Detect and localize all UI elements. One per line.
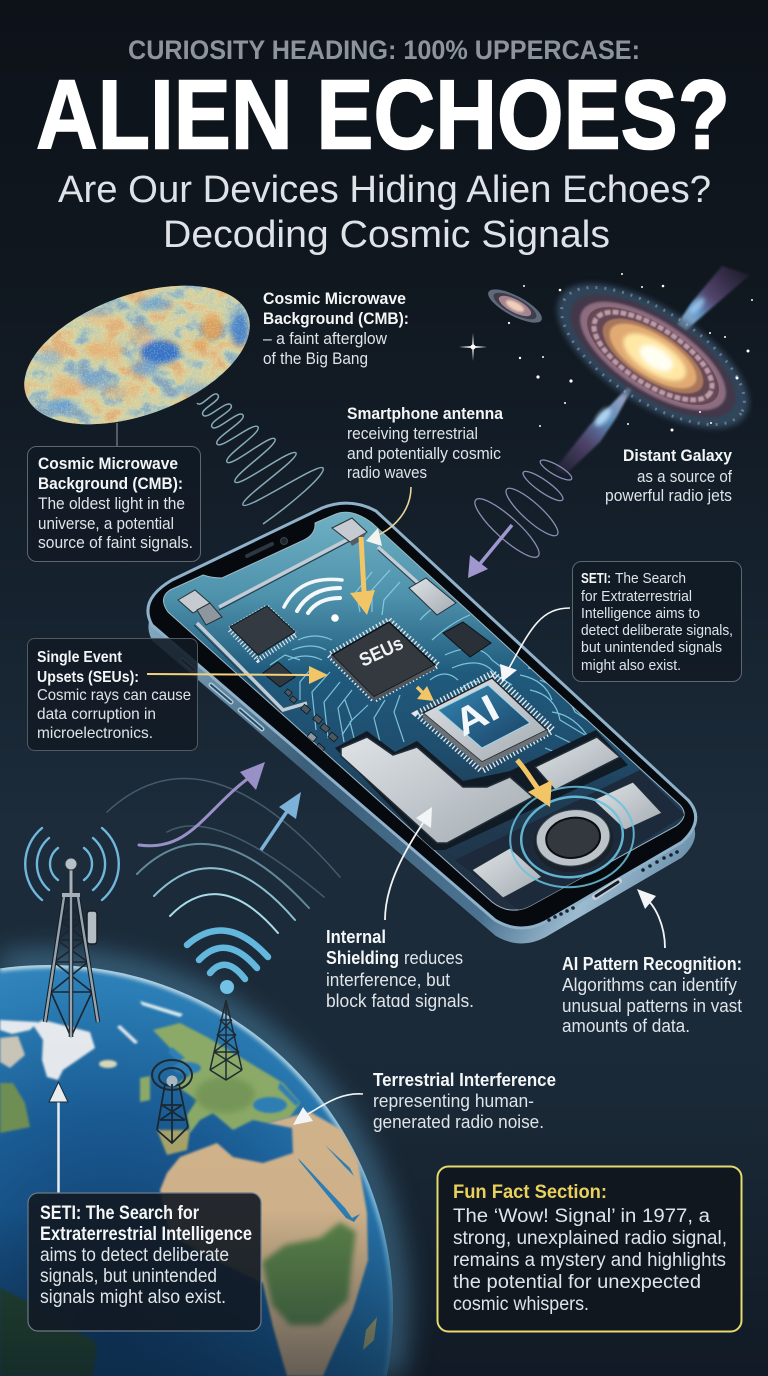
panel: fun fact: the potential for unexpected (453, 1272, 701, 1293)
label: terrestrial interference: generated radio noise. (373, 1112, 544, 1132)
small left chip (263, 662, 295, 687)
label: internal shielding (326, 927, 474, 1011)
label: smartphone antenna: radio waves (347, 463, 427, 482)
panel: SETI callout on phone: for Extraterrestrial (581, 588, 692, 605)
chip: SEUs: SEUs (356, 633, 407, 672)
illustration: distant galaxy (484, 256, 768, 474)
left module (178, 590, 222, 625)
label: CMB afterglow: of the Big Bang (263, 349, 368, 368)
silver module bottom (472, 848, 542, 898)
board traces (270, 570, 588, 752)
arrow: SEUs label (147, 666, 328, 684)
panel: single event upsets: Cosmic rays can cause (37, 687, 191, 704)
label: internal shielding: Shielding (326, 948, 399, 968)
sea: Red Sea and Gulf (298, 1145, 360, 1222)
subtitle (58, 169, 711, 256)
arrow: purple terrestrial signal (139, 762, 265, 846)
panel: SETI callout: signals, but unintended (40, 1266, 217, 1287)
icon: mid radio tower (210, 1000, 242, 1080)
land: Africa and Middle East (160, 1112, 368, 1376)
horizon rim (0, 965, 393, 1376)
subtitle: Decoding Cosmic Signals (163, 214, 610, 256)
curiosity heading: CURIOSITY HEADING: 100% UPPERCASE: (128, 35, 640, 65)
label: CMB afterglow (263, 289, 409, 368)
icon: small radio tower (152, 1060, 192, 1143)
panel: SETI callout: aims to detect deliberate (40, 1245, 229, 1266)
label: internal shielding: Internal (326, 927, 386, 947)
panel: SETI callout on phone: SETI: (581, 570, 611, 587)
label: distant galaxy: as a source of (637, 467, 732, 486)
arrow: blue terrestrial signal (261, 792, 301, 850)
panel: CMB callout: Cosmic Microwave (38, 454, 178, 473)
chip: AI (418, 674, 552, 770)
panel: SETI callout on phone: might also exist. (581, 657, 681, 674)
panel: SETI callout (28, 1193, 261, 1331)
label: AI pattern recognition: amounts of data. (562, 1016, 690, 1036)
home button with signal rings (504, 779, 640, 895)
right module (409, 578, 456, 615)
arrow: internal shielding (385, 807, 432, 920)
antenna module (332, 518, 367, 546)
side buttons (182, 660, 262, 729)
label: AI pattern recognition: AI Pattern Recognition: (562, 954, 742, 974)
rails (196, 538, 419, 712)
arrow: AI pattern recognition (637, 889, 665, 948)
phone body side (148, 519, 696, 944)
label: smartphone antenna: receiving terrestrial (347, 424, 478, 443)
land: Madagascar (363, 1317, 377, 1350)
panel: SETI callout on phone (572, 562, 742, 682)
panel: single event upsets: Single Event (37, 649, 123, 666)
label: smartphone antenna (347, 404, 503, 482)
panel: SETI callout on phone: The Search (615, 570, 686, 587)
panel: fun fact: Fun Fact Section: (453, 1182, 607, 1203)
label: terrestrial interference: representing human- (373, 1091, 534, 1111)
stars (459, 273, 753, 432)
panel: single event upsets: data corruption in (37, 706, 156, 723)
signal arcs (107, 778, 340, 933)
wifi icon on board (284, 579, 342, 622)
label: internal shielding: reduces (404, 948, 463, 968)
panel: CMB callout: The oldest light in the (38, 494, 185, 513)
illustration: cosmic microwave background map (24, 286, 250, 424)
panel: CMB callout: source of faint signals. (38, 533, 193, 552)
arrow: smartphone antenna label (366, 487, 411, 546)
silver module right (593, 782, 662, 830)
label: CMB afterglow: Cosmic Microwave (263, 289, 406, 308)
label: internal shielding: interference, but (326, 970, 450, 990)
shield backing (335, 730, 628, 850)
label: distant galaxy: powerful radio jets (605, 486, 732, 505)
label: terrestrial interference (373, 1070, 556, 1132)
arrow: antenna to SEUs (350, 537, 375, 615)
arrow: SEUs to AI (417, 686, 434, 701)
panel: CMB callout (28, 446, 200, 562)
panel: SETI callout on phone: detect deliberate signals, (581, 622, 733, 639)
radio wave: cosmic background (197, 394, 323, 524)
panel: CMB callout: universe, a potential (38, 514, 174, 533)
land: inner Europe shading (195, 1077, 255, 1113)
label: AI pattern recognition: Algorithms can identify (562, 975, 737, 995)
label: CMB afterglow: – a faint afterglow (263, 329, 388, 348)
phone screen board (163, 512, 684, 910)
subtitle: Are Our Devices Hiding Alien Echoes? (58, 169, 711, 211)
panel: fun fact (438, 1166, 742, 1332)
arrow: SETI label to tower (49, 1082, 68, 1193)
label: CMB afterglow: Background (CMB): (263, 309, 409, 328)
panel: CMB callout: Background (CMB): (38, 474, 183, 493)
charging port (595, 881, 619, 897)
panel: SETI callout: SETI: The Search for (40, 1203, 200, 1224)
phone (148, 503, 696, 944)
arrow: SETI panel to AI chip (500, 608, 570, 682)
panel: single event upsets (28, 638, 198, 750)
icon: large radio tower (25, 828, 119, 1037)
small right chip (443, 622, 491, 657)
icon: wifi over Earth (187, 931, 268, 994)
panel: fun fact: The ‘Wow! Signal’ in 1977, a (453, 1206, 710, 1227)
panel: SETI callout on phone: Intelligence aims to (581, 605, 700, 622)
lower board (455, 770, 685, 915)
land: Greenland and arctic (0, 1001, 183, 1080)
connector line (116, 423, 118, 446)
panel: single event upsets: microelectronics. (37, 725, 153, 742)
panel: SETI callout on phone: but unintended signals (581, 639, 722, 656)
label: AI pattern recognition (562, 954, 742, 1036)
panel: SETI callout: signals might also exist. (40, 1287, 226, 1308)
arrow: AI to button (517, 760, 552, 807)
panel: fun fact: remains a mystery and highlights (453, 1250, 726, 1271)
panel: fun fact: cosmic whispers. (453, 1294, 589, 1315)
label: smartphone antenna: Smartphone antenna (347, 404, 503, 423)
radio wave: galaxy jets (468, 457, 574, 564)
label: AI pattern recognition: unusual patterns in vast (562, 996, 742, 1016)
phone bezel (148, 503, 696, 928)
camera and earpiece (247, 538, 288, 556)
label: smartphone antenna: and potentially cosmic (347, 444, 501, 463)
land: Europe (140, 1023, 300, 1155)
land: North America (0, 1083, 30, 1133)
land: central Africa (262, 1222, 356, 1325)
label: distant galaxy (605, 446, 732, 505)
arrow: galaxy signal (468, 525, 512, 578)
label: distant galaxy: Distant Galaxy (623, 446, 732, 465)
panel: single event upsets: Upsets (SEUs): (37, 669, 139, 686)
label: terrestrial interference: Terrestrial Interference (373, 1070, 556, 1090)
small board components (284, 689, 338, 753)
speaker grills (547, 850, 679, 922)
panel: SETI callout: Extraterrestrial Intelligence (40, 1224, 252, 1245)
shielding bar (535, 737, 620, 790)
sea: Black and Baltic (168, 1047, 300, 1113)
label: internal shielding: block fatɑd signals. (326, 991, 474, 1011)
chip: AI: AI (448, 687, 506, 745)
earth (0, 960, 420, 1376)
panel: fun fact: strong, unexplained radio signal, (453, 1228, 727, 1249)
chip: SEUs (329, 620, 438, 701)
arrow: terrestrial interference (293, 1094, 363, 1125)
internal shielding plate (341, 737, 533, 843)
land: South America (0, 1288, 97, 1376)
black chip (229, 606, 296, 660)
